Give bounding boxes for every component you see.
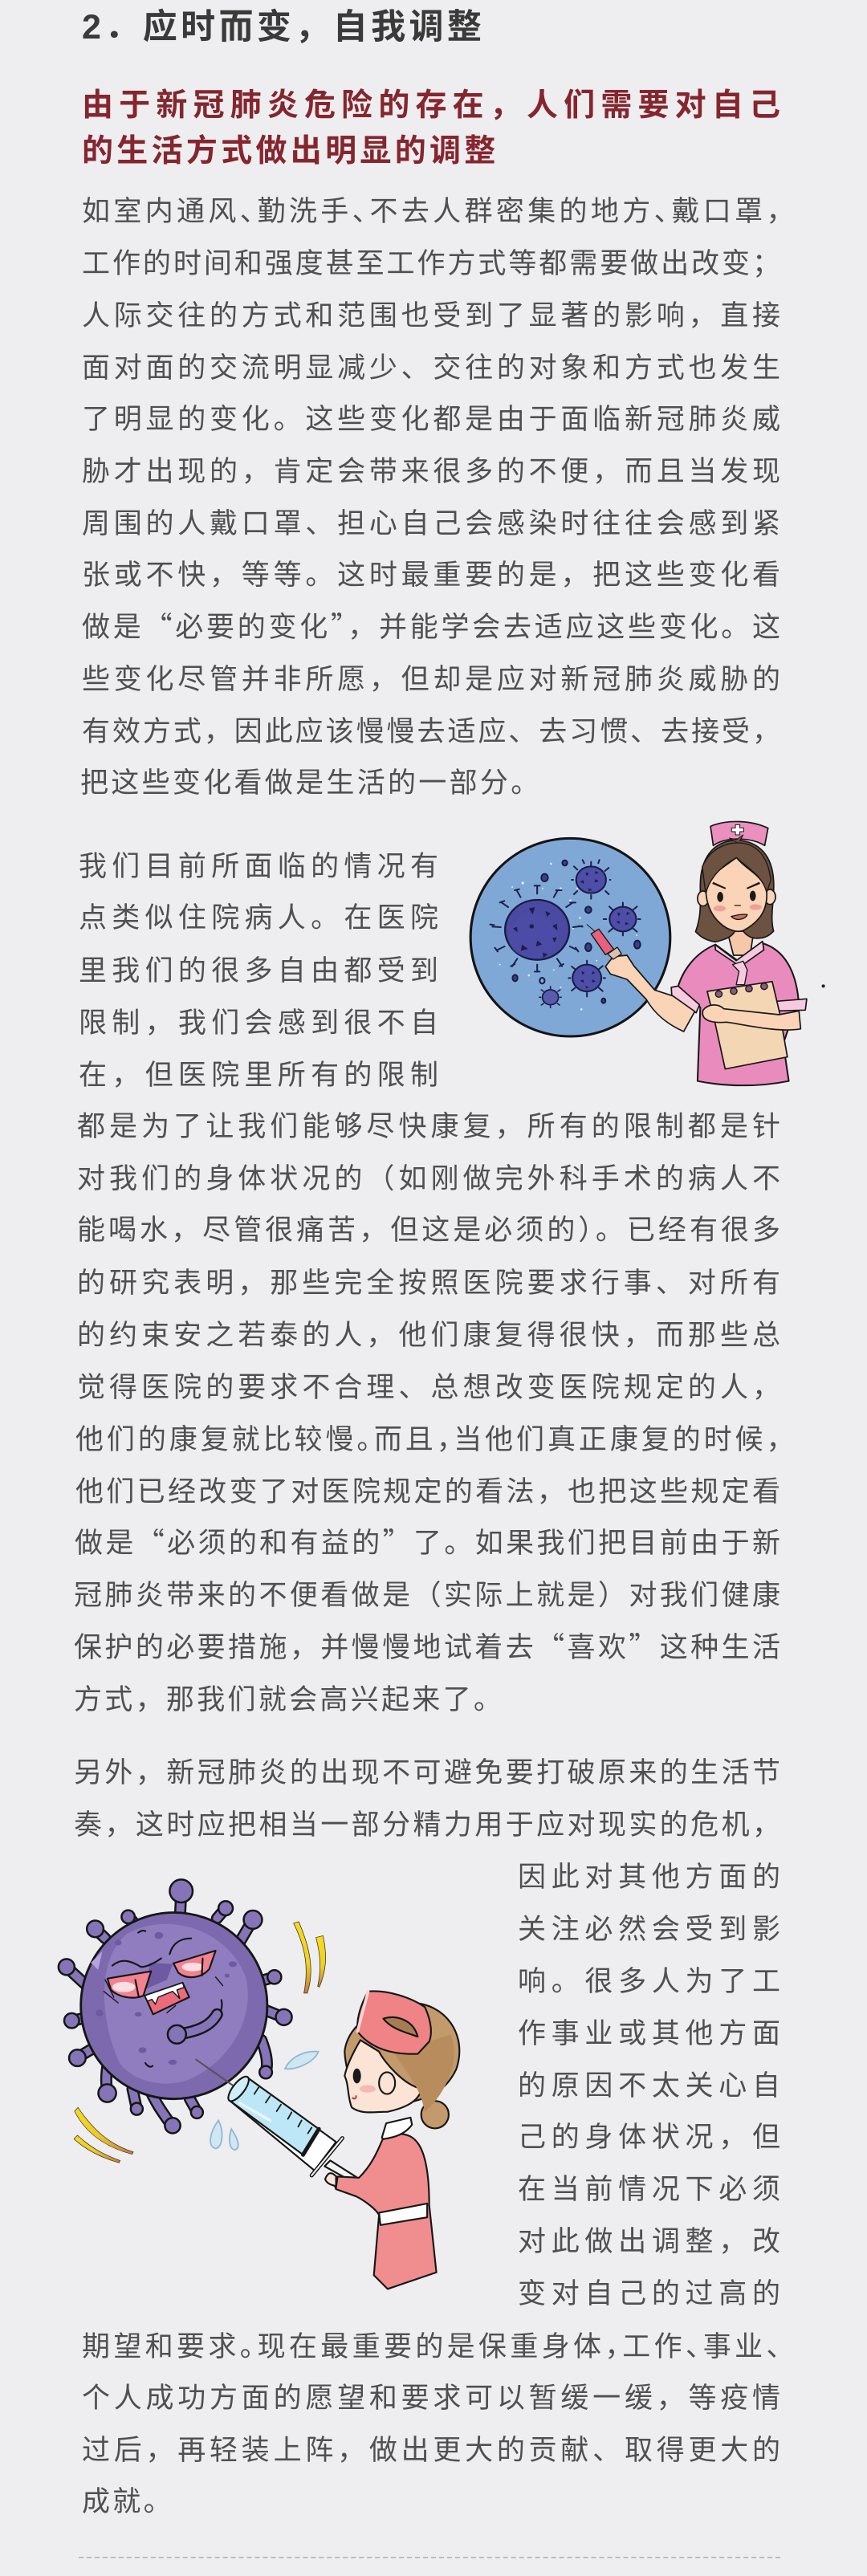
text block: paragraph two continued: 做是“必须的和有益的”了。如果我们把目前由于新 (75, 1520, 780, 1561)
text block: paragraph two continued: 觉得医院的要求不合理、总想改变医院规定的人， (77, 1365, 780, 1406)
icon: small virus (539, 987, 561, 1007)
text block: paragraph two beside the nurse illustration: 里我们的很多自由都受到 (79, 948, 438, 989)
icon: magnified circle (470, 838, 670, 1036)
text block: paragraph three beside the illustration: 在当前情况下必须 (518, 2167, 780, 2208)
text block: paragraph two continued: 他们的康复就比较慢。而且，当他们真正康复的时候， (75, 1417, 780, 1458)
icon: small particles (512, 861, 641, 1003)
text block: paragraph three closing (82, 2324, 780, 2520)
icon: large virus (490, 885, 583, 971)
icon: water drops (210, 2051, 318, 2150)
icon: lower virus (568, 961, 605, 996)
icon: virus spikes (59, 1879, 292, 2134)
icon: right virus (604, 902, 641, 935)
text block: paragraph one: 些变化尽管并非所愿，但却是应对新冠肺炎威胁的 (82, 657, 780, 698)
text block: paragraph one: 人际交往的方式和范围也受到了显著的影响，直接 (82, 293, 780, 334)
text block: paragraph one: 如室内通风、勤洗手、不去人群密集的地方、戴口罩， (82, 189, 780, 230)
icon: syringe (196, 2060, 356, 2180)
text block: paragraph one: 张或不快，等等。这时最重要的是，把这些变化看 (82, 552, 780, 593)
icon: yellow motion marks (74, 1922, 326, 2163)
text block: paragraph two continued (74, 1104, 780, 1718)
icon: virus body (81, 1912, 267, 2099)
text block: paragraph two continued: 都是为了让我们能够尽快康复，所有的限制都是针 (77, 1104, 780, 1145)
text block: paragraph two continued: 的约束安之若泰的人，他们康复得很快，而那些总 (77, 1312, 780, 1353)
text block: paragraph one: 把这些变化看做是生活的一部分。 (80, 760, 542, 801)
illustration: nurse injecting a purple virus (58, 1878, 461, 2289)
text block: paragraph three beside the illustration: 对此做出调整，改 (518, 2219, 780, 2260)
text block: paragraph two beside the nurse illustration: 我们目前所面临的情况有 (79, 844, 438, 885)
subheading: red summary statement (82, 80, 780, 171)
text block: paragraph three beside the illustration: 变对自己的过高的 (518, 2271, 780, 2312)
text block: paragraph two continued: 他们已经改变了对医院规定的看法，也把这些规定看 (75, 1469, 780, 1510)
text block: paragraph two continued: 方式，那我们就会高兴起来了。 (74, 1677, 504, 1718)
text block: paragraph one: 做是“必要的变化”，并能学会去适应这些变化。这 (82, 604, 780, 645)
text block: paragraph three beside the illustration: 作事业或其他方面 (518, 2011, 780, 2052)
icon: virus arm (168, 2014, 217, 2044)
icon: stray dot (822, 984, 825, 987)
icon: nurse (325, 1991, 459, 2289)
text block: paragraph three closing: 成就。 (82, 2479, 174, 2520)
text block: paragraph two continued: 的研究表明，那些完全按照医院要求行事、对所有 (77, 1260, 780, 1301)
text block: paragraph one: 有效方式，因此应该慢慢去适应、去习惯、去接受， (82, 709, 780, 750)
text block: paragraph three closing: 过后，再轻装上阵，做出更大的贡献、取得更大的 (82, 2427, 780, 2468)
text block: paragraph three opening (74, 1750, 780, 1843)
text block: paragraph three opening: 奏，这时应把相当一部分精力用于应对现实的危机， (74, 1802, 780, 1843)
text block: paragraph two beside the nurse illustration (79, 844, 438, 1093)
text block: paragraph two beside the nurse illustration: 在，但医院里所有的限制 (79, 1052, 438, 1093)
text block: paragraph one (80, 189, 780, 801)
icon: nurse figure (587, 821, 807, 1085)
title: section heading: 2．应时而变，自我调整 (82, 8, 485, 47)
text block: paragraph three opening: 另外，新冠肺炎的出现不可避免要打破原来的生活节 (74, 1750, 780, 1791)
text block: paragraph three beside the illustration: 因此对其他方面的 (518, 1854, 780, 1895)
icon: virus angry face (104, 1931, 223, 2067)
subheading: red summary statement: 的生活方式做出明显的调整 (82, 126, 499, 171)
text block: paragraph two continued: 对我们的身体状况的（如刚做完外科手术的病人不 (77, 1156, 780, 1197)
text block: paragraph three beside the illustration: 响。很多人为了工 (518, 1959, 780, 2000)
text block: paragraph two beside the nurse illustration: 限制，我们会感到很不自 (79, 1000, 438, 1041)
icon: upper virus (572, 860, 610, 899)
text block: paragraph one: 面对面的交流明显减少、交往的对象和方式也发生 (82, 345, 780, 386)
text block: paragraph two beside the nurse illustration: 点类似住院病人。在医院 (79, 895, 438, 936)
text block: paragraph three closing: 期望和要求。现在最重要的是保重身体，工作、事业、 (82, 2324, 780, 2365)
text block: paragraph three beside the illustration: 己的身体状况，但 (518, 2114, 780, 2155)
text block: paragraph three beside the illustration (518, 1854, 780, 2312)
text block: paragraph one: 工作的时间和强度甚至工作方式等都需要做出改变； (82, 241, 780, 282)
text block: paragraph one: 周围的人戴口罩、担心自己会感染时往往会感到紧 (82, 501, 780, 542)
text block: paragraph three closing: 个人成功方面的愿望和要求可以暂缓一缓，等疫情 (82, 2375, 780, 2416)
text block: paragraph two continued: 保护的必要措施，并慢慢地试着去“喜欢”这种生活 (74, 1625, 780, 1666)
illustration: nurse pointing at viruses under a lens (469, 820, 825, 1087)
text block: paragraph three beside the illustration: 的原因不太关心自 (518, 2063, 780, 2104)
text block: paragraph three beside the illustration: 关注必然会受到影 (518, 1907, 780, 1947)
text block: paragraph one: 了明显的变化。这些变化都是由于面临新冠肺炎威 (82, 397, 780, 437)
text block: paragraph two continued: 冠肺炎带来的不便看做是（实际上就是）对我们健康 (74, 1573, 780, 1614)
text block: paragraph one: 胁才出现的，肯定会带来很多的不便，而且当发现 (82, 449, 780, 490)
text block: paragraph two continued: 能喝水，尽管很痛苦，但这是必须的）。已经有很多 (77, 1207, 780, 1248)
subheading: red summary statement: 由于新冠肺炎危险的存在，人们需要对自己 (82, 80, 780, 125)
